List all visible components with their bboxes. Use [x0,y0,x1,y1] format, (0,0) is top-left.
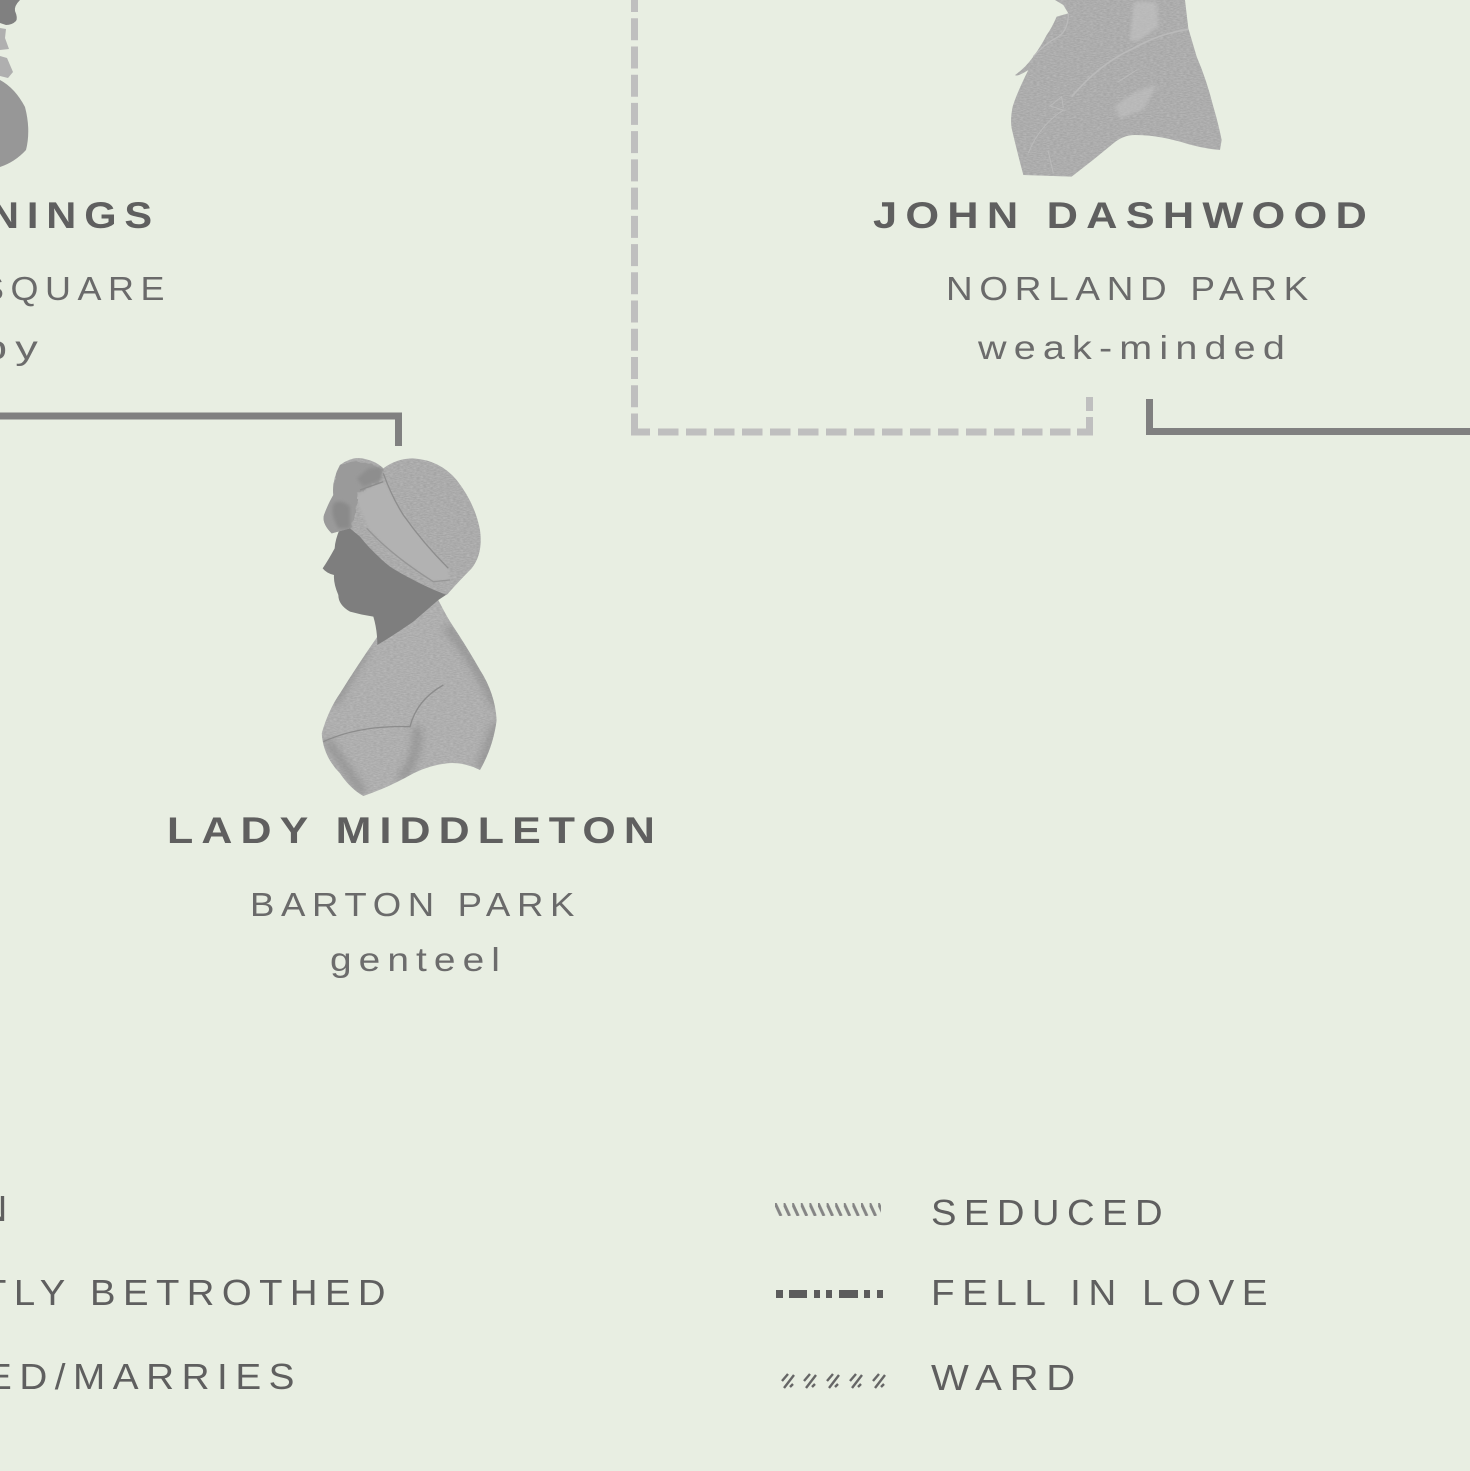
portrait: Mrs Jennings (cropped) [0,0,28,167]
portrait: John Dashwood [1011,0,1222,177]
name: Lady Middleton: LADY MIDDLETON [167,810,663,851]
place: Barton Park: BARTON PARK [250,886,581,923]
portrait: Lady Middleton [322,458,496,796]
trait: weak-minded: weak-minded [977,329,1292,366]
dress [322,600,496,796]
name: John Dashwood: JOHN DASHWOOD [873,195,1375,236]
legend label: ward: WARD [931,1357,1083,1398]
face [323,517,448,645]
legend label: seduced: SEDUCED [931,1192,1170,1233]
legend symbol: seduced [775,1203,881,1216]
legend symbol: fell in love [776,1290,883,1298]
connector: solid line to Lady Middleton [0,416,398,446]
legend label: fell in love: FELL IN LOVE [931,1272,1275,1313]
legend symbol: ward [782,1374,885,1388]
trait: genteel: genteel [330,941,507,978]
connector: solid line from John Dashwood [1150,399,1470,432]
lace [320,461,382,537]
place: Norland Park: NORLAND PARK [946,270,1315,307]
turban [324,458,481,595]
connector: dashed line, John Dashwood [631,0,1093,435]
